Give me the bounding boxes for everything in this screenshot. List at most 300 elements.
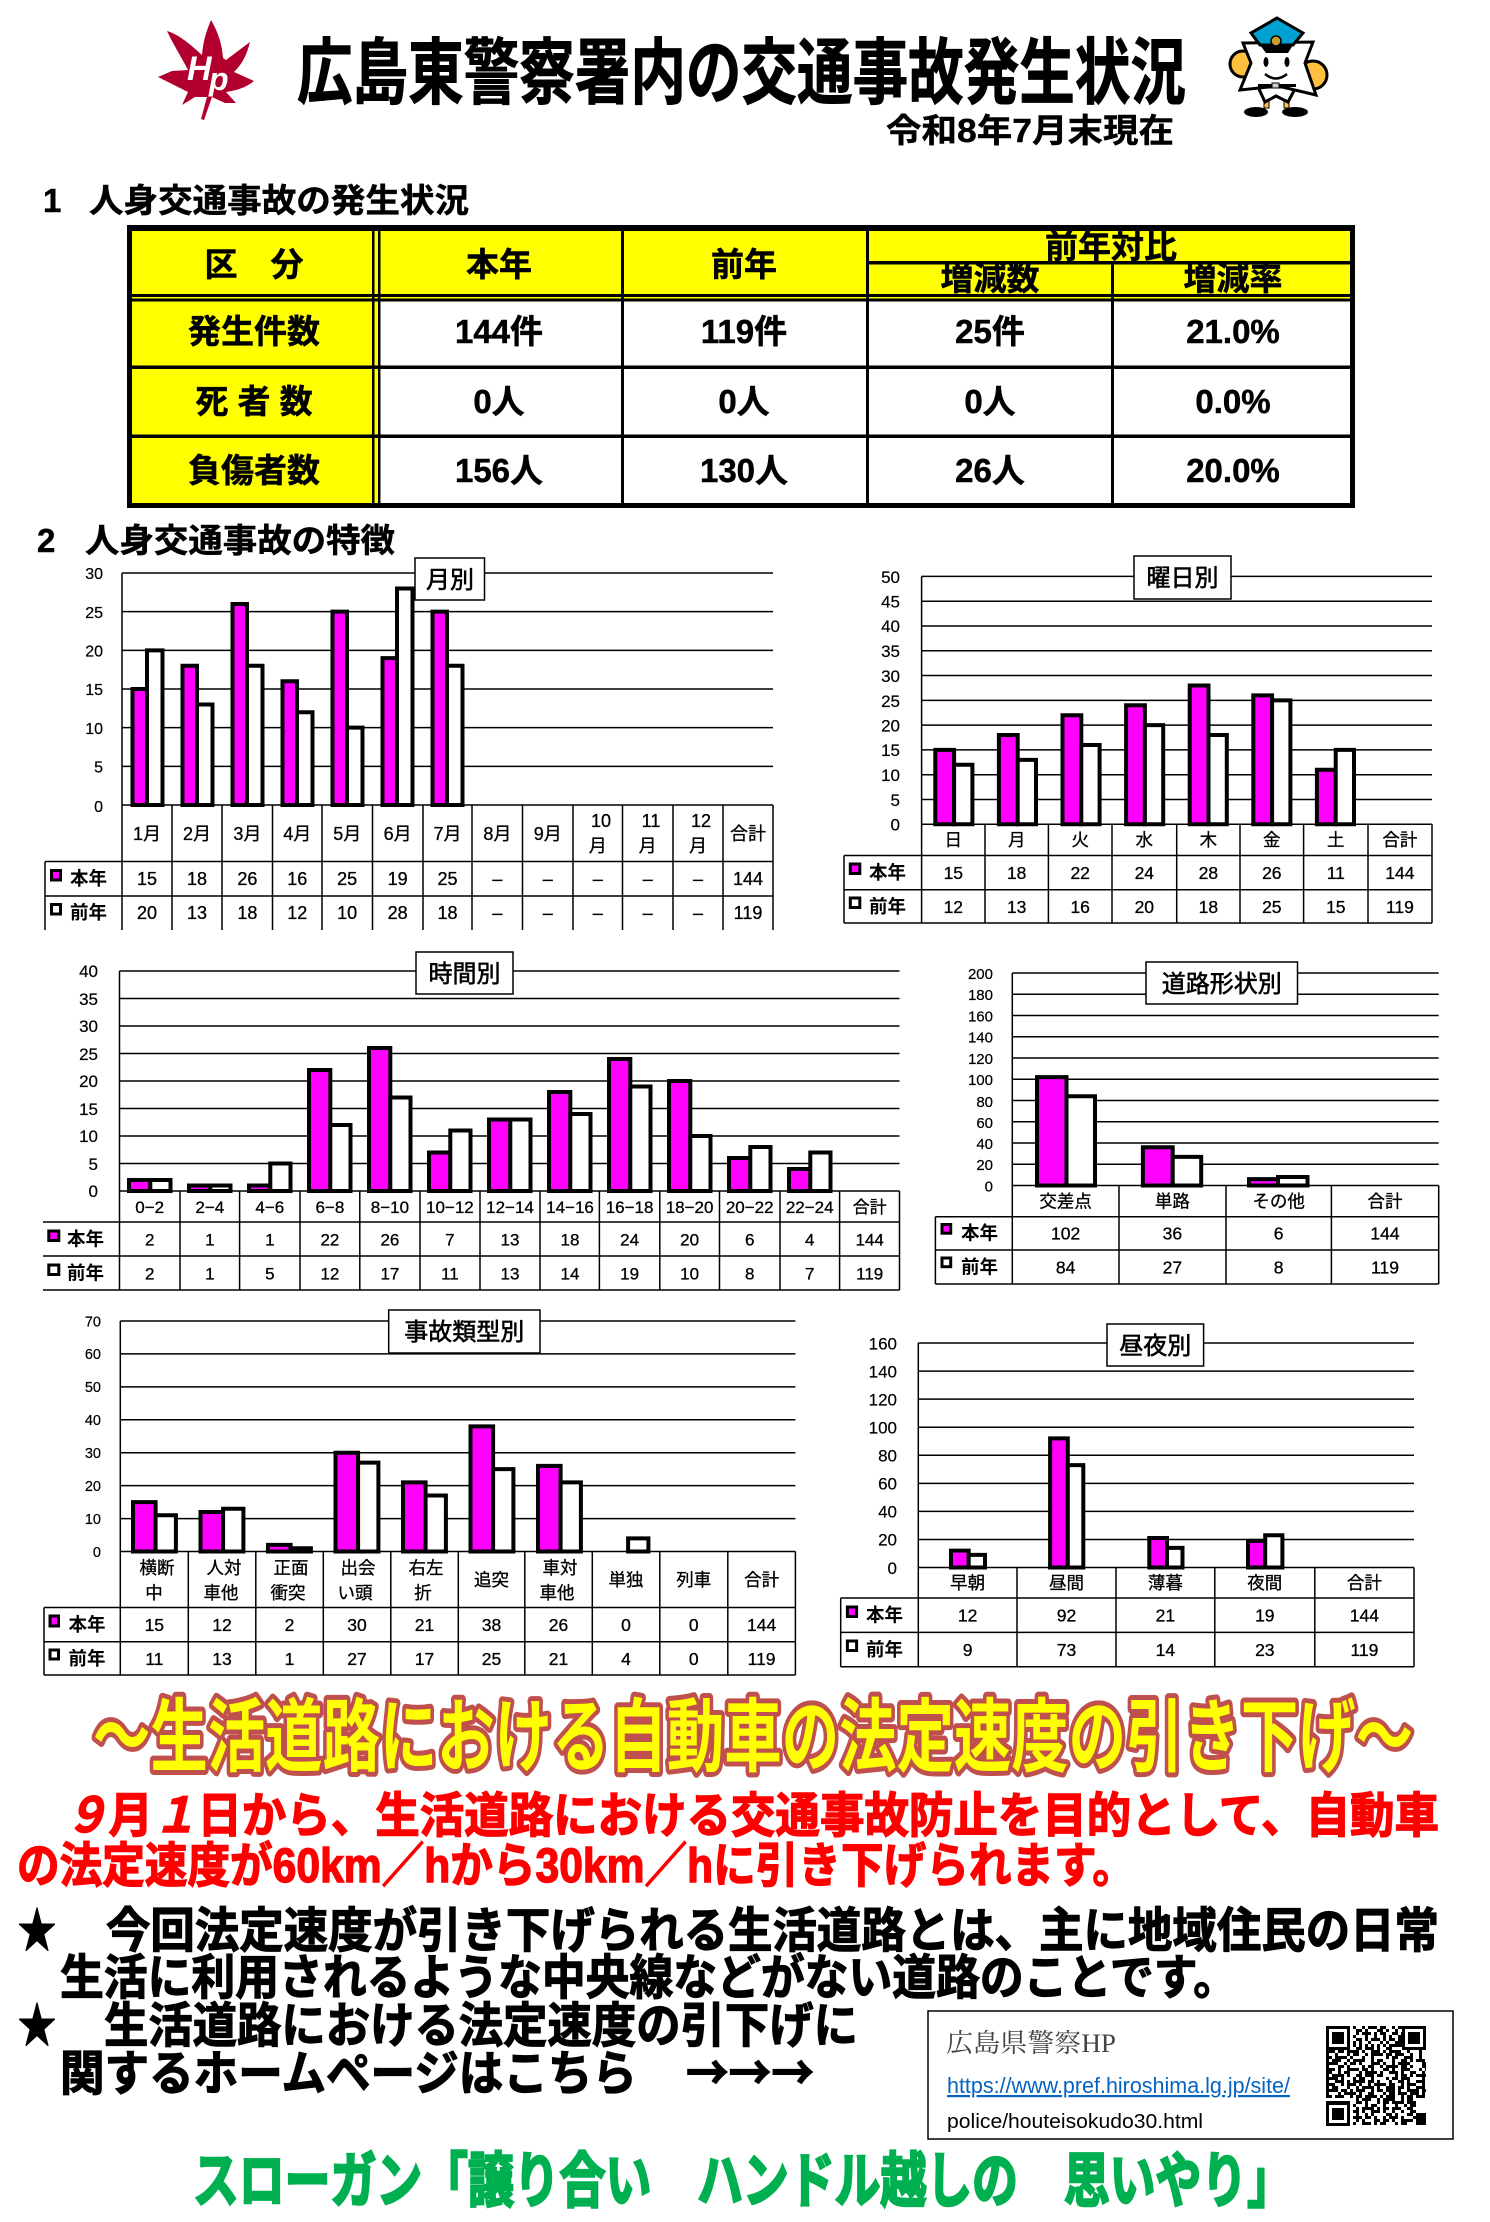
bars and grid: hour [120, 971, 900, 1191]
data table: month: 4月 [283, 824, 311, 844]
y axis labels: hour: 0 [89, 1182, 98, 1201]
data table: month: 11 [642, 811, 660, 831]
data table: hour: 19 [620, 1264, 639, 1284]
panel: chart by road shape [935, 962, 1439, 1284]
data table: weekday: 本年 [869, 862, 906, 883]
data table: weekday: 合計 [1382, 830, 1417, 850]
data table: month [45, 805, 773, 930]
row: 死者数: 0人 [718, 383, 770, 420]
data table: weekday: 18 [1007, 863, 1026, 883]
panel: chart by accident type [44, 1310, 795, 1675]
panel: police homepage link and QR code: police/houteisokudo30.html [947, 2111, 1203, 2133]
data table: month: – [593, 903, 603, 923]
data table: accident type: 26 [549, 1615, 568, 1635]
data table: hour: 2−4 [195, 1198, 224, 1217]
y axis labels: accident type: 30 [85, 1446, 101, 1462]
data table: month: 8月 [483, 824, 511, 844]
data table: month: 18 [437, 903, 458, 923]
data table: road shape: 8 [1274, 1258, 1283, 1278]
data table: month: 13 [187, 903, 207, 923]
y axis labels: month: 30 [85, 566, 103, 583]
data table: month: – [593, 869, 603, 889]
data table: hour: 合計 [853, 1198, 887, 1217]
table header labels: 増減率 [1184, 260, 1282, 297]
y axis labels: road shape [968, 966, 993, 1196]
data table: month: 月 [639, 836, 657, 856]
data table: month: – [543, 869, 553, 889]
data table: road shape: 102 [1051, 1224, 1080, 1244]
data table: month: 10 [591, 811, 611, 831]
data table: hour: 6 [745, 1230, 754, 1250]
data table: hour: 4−6 [255, 1198, 284, 1217]
data table: accident type: 車他 [540, 1583, 574, 1603]
data table: month: 16 [287, 869, 307, 889]
data table: hour: 10−12 [426, 1198, 474, 1217]
data table: accident type: 21 [549, 1649, 568, 1669]
table header labels [204, 228, 1282, 297]
data table: month: – [492, 903, 502, 923]
data table: hour: 1 [205, 1264, 215, 1284]
data table: hour: 6−8 [315, 1198, 344, 1217]
data table: day/night: 23 [1255, 1640, 1275, 1660]
data table: month: 20 [137, 903, 157, 923]
data table: weekday: 15 [944, 863, 963, 883]
data table: accident type: 車対 [542, 1558, 578, 1578]
data table: month: – [643, 869, 653, 889]
y axis labels: day/night: 160 [869, 1334, 897, 1354]
data table: month: 25 [437, 869, 458, 889]
data table: accident type: 衝突 [270, 1583, 306, 1603]
y axis labels: hour: 10 [79, 1127, 98, 1146]
data table: weekday: 18 [1199, 897, 1218, 917]
data table: accident type: 本年 [68, 1614, 106, 1635]
y axis labels: hour: 30 [79, 1017, 98, 1036]
data table: accident type: 0 [689, 1649, 699, 1669]
data table: hour: 1 [265, 1230, 275, 1250]
row: 死者数: 0人 [964, 383, 1016, 420]
data table: weekday [844, 824, 1432, 923]
y axis labels: weekday: 35 [881, 642, 900, 661]
data table: accident type [44, 1552, 795, 1675]
data table: hour: 2 [145, 1230, 154, 1250]
data table: month: – [693, 869, 703, 889]
y axis labels: accident type [85, 1314, 101, 1561]
y axis labels: day/night: 100 [869, 1418, 897, 1438]
y axis labels: weekday: 15 [881, 741, 900, 760]
data table: road shape: 144 [1370, 1224, 1400, 1244]
y axis labels: road shape: 100 [968, 1072, 993, 1089]
data table: hour: 本年 [67, 1228, 104, 1250]
data table: month: 19 [388, 869, 408, 889]
y axis labels: weekday [881, 568, 900, 834]
heading: 道路形状別: 道路形状別 [1162, 971, 1282, 998]
y axis labels: accident type: 0 [93, 1545, 101, 1561]
data table: month: 10 [337, 903, 357, 923]
bars and grid: road shape [1012, 973, 1439, 1186]
bars and grid: day/night [918, 1343, 1414, 1568]
data table: month: 月 [589, 836, 607, 856]
title: 広島東警察署内の交通事故発生状況 [297, 34, 1186, 114]
data table: weekday: 前年 [869, 896, 906, 917]
data table: road shape: 交差点 [1039, 1192, 1092, 1212]
row: 死者数: 0人 [473, 383, 525, 420]
data table: day/night: 144 [1350, 1606, 1379, 1626]
row: 発生件数: 21.0% [1186, 313, 1280, 350]
data table: month: 12 [287, 903, 307, 923]
data table: hour: 13 [501, 1264, 519, 1284]
row: 死者数: 死 者 数 [195, 383, 313, 420]
y axis labels: day/night [869, 1334, 897, 1578]
data table: weekday: 木 [1200, 830, 1217, 850]
y axis labels: hour: 20 [79, 1072, 98, 1091]
y axis labels: accident type: 70 [85, 1314, 101, 1330]
data table: weekday: 15 [1326, 897, 1346, 917]
data table: month: 3月 [233, 824, 261, 844]
y axis labels: day/night: 140 [869, 1362, 897, 1382]
heading: 時間別 [416, 952, 513, 994]
data table: month: – [492, 869, 502, 889]
data table: month: 26 [237, 869, 257, 889]
data table: hour: 22 [320, 1230, 339, 1250]
bars and grid: accident type [120, 1321, 795, 1552]
explanation text: 生活に利用されるような中央線などがない道路のことです。 [60, 1952, 1237, 2005]
data table: weekday: 月 [1008, 830, 1025, 850]
y axis labels: day/night: 60 [878, 1474, 897, 1494]
data table: hour: 4 [805, 1230, 814, 1250]
data table: month: 前年 [70, 902, 107, 923]
data table: day/night [841, 1568, 1414, 1667]
row: 発生件数: 119件 [701, 313, 787, 350]
data table: accident type: 1 [285, 1649, 294, 1669]
y axis labels: day/night: 40 [878, 1502, 897, 1522]
data table: road shape: 119 [1371, 1258, 1399, 1278]
data table: accident type: 15 [145, 1615, 164, 1635]
y axis labels: road shape: 80 [976, 1094, 993, 1111]
red notice text: の法定速度が60km／hから30km／hに引き下げられます。 [17, 1840, 1135, 1893]
y axis labels: month: 20 [85, 644, 103, 660]
table header labels: 前年対比 [1045, 228, 1177, 265]
data table: accident type: 横断 [140, 1558, 174, 1578]
data table: day/night: 12 [958, 1606, 977, 1626]
data table: accident type: 前年 [68, 1648, 106, 1669]
data table: hour: 20−22 [726, 1198, 774, 1217]
data table: day/night: 薄暮 [1148, 1573, 1183, 1593]
data table: month: 6月 [384, 824, 412, 844]
data table: hour: 13 [501, 1230, 519, 1250]
data table: month: 1月 [133, 824, 161, 844]
y axis labels: weekday: 30 [881, 667, 900, 686]
data table: hour: 7 [445, 1230, 455, 1250]
data table: road shape: 36 [1163, 1224, 1182, 1244]
data table: weekday: 25 [1262, 897, 1282, 917]
data table: month: 28 [388, 903, 408, 923]
data table: hour: 24 [620, 1230, 639, 1250]
data table: hour: 1 [205, 1230, 215, 1250]
data table: hour: 18−20 [666, 1198, 713, 1217]
table header labels: 区 分 [204, 246, 304, 283]
row: 発生件数: 144件 [455, 313, 543, 350]
icon: QR code [1326, 2026, 1426, 2126]
y axis labels: weekday: 50 [881, 568, 900, 587]
data table: month: 25 [337, 869, 357, 889]
data table: day/night: 19 [1255, 1606, 1275, 1626]
y axis labels: hour: 40 [79, 962, 98, 981]
heading: 時間別: 時間別 [428, 961, 500, 988]
homepage notice text: 生活道路における法定速度の引下げに [104, 2000, 858, 2053]
y axis labels: weekday: 10 [881, 766, 900, 785]
data table: weekday: 20 [1135, 897, 1154, 917]
data table: day/night: 夜間 [1247, 1573, 1282, 1593]
data table: accident type: 17 [415, 1649, 434, 1669]
heading: 曜日別 [1134, 556, 1231, 599]
y axis labels: month: 15 [85, 682, 103, 699]
homepage notice text: →→→ [686, 2034, 814, 2104]
y axis labels: hour [79, 962, 98, 1201]
data table: weekday: 24 [1135, 863, 1154, 883]
data table: hour: 11 [441, 1264, 459, 1284]
y axis labels: weekday: 20 [881, 716, 900, 736]
icon: police mascot [1230, 18, 1327, 117]
data table: weekday: 119 [1386, 897, 1414, 917]
row: 死者数 [195, 383, 1271, 420]
heading text: section 2 title: 人身交通事故の特徴 [85, 522, 395, 559]
homepage notice text: ★ [18, 2000, 56, 2053]
data table: hour: 8−10 [371, 1198, 409, 1217]
bars and grid: weekday [922, 576, 1432, 824]
data table: hour: 5 [265, 1264, 275, 1284]
data table: day/night: 本年 [866, 1604, 903, 1626]
row: 負傷者数: 20.0% [1186, 452, 1280, 489]
data table: weekday: 13 [1007, 897, 1026, 917]
data table: hour: 119 [856, 1264, 883, 1284]
row: 負傷者数 [188, 452, 1280, 489]
data table: accident type: 右左 [408, 1558, 444, 1578]
heading: 事故類型別 [389, 1310, 540, 1353]
y axis labels: month [85, 566, 103, 816]
heading: 道路形状別 [1146, 962, 1298, 1004]
y axis labels: hour: 5 [89, 1155, 98, 1174]
data table: hour: 12−14 [486, 1198, 534, 1217]
data table: accident type: 11 [145, 1649, 163, 1669]
data table: hour: 10 [680, 1264, 699, 1284]
panel: summary table [127, 225, 1355, 508]
data table: month: 18 [187, 869, 207, 889]
data table: accident type: 2 [285, 1615, 294, 1635]
data table: accident type: 0 [689, 1615, 699, 1635]
data table: road shape: 84 [1056, 1258, 1076, 1278]
heading: 月別: 月別 [426, 567, 474, 594]
data table: hour: 17 [380, 1264, 399, 1284]
red notice text [17, 1790, 1439, 1893]
y axis labels: weekday: 5 [891, 791, 900, 810]
y axis labels: road shape: 120 [968, 1051, 993, 1068]
data table: accident type: 21 [415, 1615, 434, 1635]
panel: police homepage link and QR code: 広島県警察HP [946, 2029, 1116, 2058]
y axis labels: accident type: 40 [85, 1413, 101, 1429]
data table: accident type: 30 [347, 1615, 367, 1635]
data table: day/night: 合計 [1347, 1573, 1382, 1593]
data table: accident type: 中 [145, 1583, 163, 1603]
heading: section 2: 2 [37, 522, 55, 559]
data table: month: 18 [237, 903, 257, 923]
heading: section 1: 1 [43, 182, 61, 219]
panel: chart by month [45, 558, 773, 930]
y axis labels: day/night: 80 [878, 1446, 897, 1466]
data table: weekday: 火 [1071, 830, 1089, 850]
data table: month: 合計 [730, 824, 766, 844]
data table: hour: 2 [145, 1264, 154, 1284]
homepage notice text [18, 2000, 858, 2104]
row: 負傷者数: 26人 [955, 452, 1025, 489]
data table: accident type: 27 [347, 1649, 367, 1669]
row: 発生件数: 25件 [955, 313, 1025, 350]
y axis labels: road shape: 0 [985, 1178, 993, 1196]
icon: maple leaf HP logo: H [187, 50, 213, 88]
data table: hour: 144 [856, 1230, 884, 1250]
homepage notice text: 関するホームページはこちら [60, 2048, 637, 2101]
y axis labels: road shape: 20 [976, 1157, 993, 1174]
data table: hour: 前年 [67, 1262, 104, 1284]
data table: day/night: 73 [1057, 1640, 1076, 1660]
data table: accident type: 25 [482, 1649, 501, 1669]
data table: month: – [693, 903, 703, 923]
y axis labels: road shape: 160 [968, 1008, 993, 1026]
data table: weekday: 11 [1327, 863, 1345, 883]
data table: month: – [543, 903, 553, 923]
data table: month: 144 [733, 869, 763, 889]
row: 負傷者数: 負傷者数 [188, 452, 320, 489]
data table: road shape: 単路 [1155, 1192, 1190, 1212]
data table: road shape: 本年 [961, 1222, 998, 1244]
data table: day/night: 昼間 [1049, 1573, 1084, 1593]
y axis labels: day/night: 0 [888, 1559, 897, 1578]
data table: accident type: 0 [621, 1615, 631, 1635]
data table: hour: 8 [745, 1264, 754, 1284]
data table: day/night: 14 [1156, 1640, 1175, 1660]
data table: hour [43, 1191, 900, 1290]
y axis labels: hour: 15 [79, 1100, 98, 1119]
panel: chart by day/night [841, 1324, 1414, 1667]
data table: day/night: 早朝 [950, 1573, 985, 1593]
y axis labels: hour: 35 [79, 990, 98, 1009]
data table: accident type: 車他 [204, 1583, 238, 1603]
data table: hour: 14−16 [546, 1198, 594, 1217]
data table: road shape: 27 [1163, 1258, 1182, 1278]
table header labels: 前年 [711, 246, 777, 283]
y axis labels: road shape: 180 [968, 987, 993, 1004]
data table: weekday: 金 [1263, 830, 1281, 850]
row: 負傷者数: 156人 [455, 452, 543, 489]
data table: accident type: 人対 [206, 1558, 242, 1578]
data table: month: 15 [137, 869, 157, 889]
y axis labels: accident type: 60 [85, 1347, 101, 1363]
data table: accident type: い頭 [338, 1583, 373, 1603]
y axis labels: weekday: 45 [881, 592, 900, 612]
data table: day/night: 119 [1350, 1640, 1378, 1660]
data table: accident type: 4 [621, 1649, 631, 1669]
data table: hour: 0−2 [135, 1198, 164, 1217]
y axis labels: road shape: 40 [976, 1136, 993, 1153]
data table: accident type: 合計 [744, 1570, 779, 1590]
data table: weekday: 日 [945, 830, 962, 850]
data table: accident type: 12 [212, 1615, 232, 1635]
data table: hour: 16−18 [606, 1198, 653, 1217]
data table: weekday: 土 [1327, 830, 1345, 850]
panel: chart by hour [43, 952, 900, 1290]
data table: month: 2月 [183, 824, 211, 844]
y axis labels: weekday: 40 [881, 617, 900, 636]
data table: accident type: 列車 [676, 1570, 711, 1590]
y axis labels: weekday: 0 [891, 816, 900, 834]
data table: hour: 7 [805, 1264, 814, 1284]
panel: chart by weekday [844, 556, 1432, 923]
row: 死者数: 0.0% [1195, 383, 1271, 420]
data table: weekday: 144 [1385, 863, 1415, 883]
data table: weekday: 12 [944, 897, 963, 917]
y axis labels: road shape: 140 [968, 1030, 993, 1046]
heading: 事故類型別: 事故類型別 [404, 1319, 524, 1346]
data table: accident type: 正面 [274, 1558, 308, 1578]
data table: day/night: 92 [1057, 1606, 1076, 1626]
explanation text: ★ [18, 1905, 56, 1958]
data table: hour: 20 [680, 1230, 699, 1250]
data table: hour: 12 [320, 1264, 339, 1284]
data table: hour: 18 [561, 1230, 579, 1250]
data table: accident type: 追突 [474, 1570, 509, 1590]
data table: road shape: その他 [1252, 1192, 1305, 1212]
data table: accident type: 38 [482, 1615, 501, 1635]
data table: road shape: 前年 [961, 1256, 998, 1278]
link text: https://www.pref.hiroshima.lg.jp/site/ [947, 2073, 1291, 2098]
data table: accident type: 119 [748, 1649, 776, 1669]
data table: month: 月 [689, 836, 707, 856]
y axis labels: day/night: 20 [878, 1530, 897, 1550]
heading: 月別 [415, 558, 484, 600]
y axis labels: month: 0 [94, 799, 103, 816]
data table: month: – [643, 903, 653, 923]
heading: 曜日別: 曜日別 [1146, 565, 1218, 592]
y axis labels: weekday: 25 [881, 692, 900, 711]
data table: weekday: 22 [1070, 863, 1090, 883]
table header labels: 増減数 [940, 260, 1040, 297]
icon: maple leaf HP logo: p [208, 61, 229, 97]
data table: accident type: 単独 [608, 1570, 644, 1590]
data table: month: 7月 [433, 824, 462, 844]
data table: road shape: 合計 [1368, 1192, 1402, 1212]
data table: weekday: 26 [1262, 863, 1282, 883]
data table: day/night: 前年 [866, 1639, 903, 1660]
icon: maple leaf HP logo [158, 20, 254, 120]
heading: 昼夜別 [1107, 1324, 1204, 1366]
data table: accident type: 折 [414, 1583, 432, 1603]
y axis labels: month: 25 [85, 605, 103, 622]
heading text: section 1 title: 人身交通事故の発生状況 [89, 182, 469, 219]
row: 負傷者数: 130人 [700, 452, 788, 489]
y axis labels: hour: 25 [79, 1045, 98, 1064]
data table: month: 本年 [70, 868, 107, 889]
data table: road shape [935, 1186, 1439, 1284]
row: 発生件数 [188, 313, 1280, 350]
data table: weekday: 水 [1136, 830, 1153, 850]
y axis labels: road shape: 60 [976, 1115, 993, 1132]
data table: hour: 26 [380, 1230, 399, 1250]
data table: weekday: 16 [1070, 897, 1090, 917]
data table: hour: 22−24 [786, 1198, 834, 1217]
y axis labels: accident type: 20 [85, 1479, 101, 1495]
table header labels: 本年 [466, 246, 532, 283]
explanation text [18, 1905, 1439, 2005]
row: 発生件数: 発生件数 [188, 313, 320, 350]
